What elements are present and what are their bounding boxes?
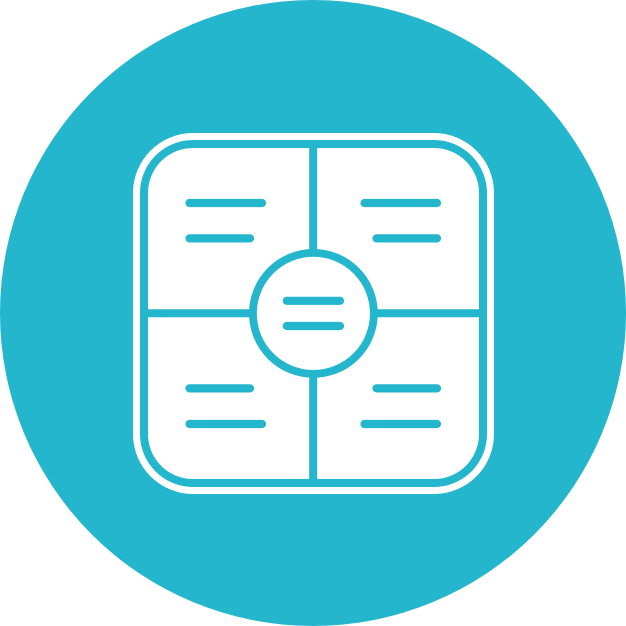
teal card outline: [144, 144, 483, 483]
bottom-left text lines: [190, 388, 262, 424]
icon: rounded square diagram: [133, 133, 494, 494]
top-left text lines: [190, 203, 262, 238]
center circle: [253, 253, 374, 374]
center text lines: [287, 301, 340, 326]
top-right text lines: [364, 203, 437, 238]
white outer card: [133, 133, 494, 494]
bottom-right text lines: [364, 388, 437, 424]
cross dividers: [144, 144, 483, 483]
